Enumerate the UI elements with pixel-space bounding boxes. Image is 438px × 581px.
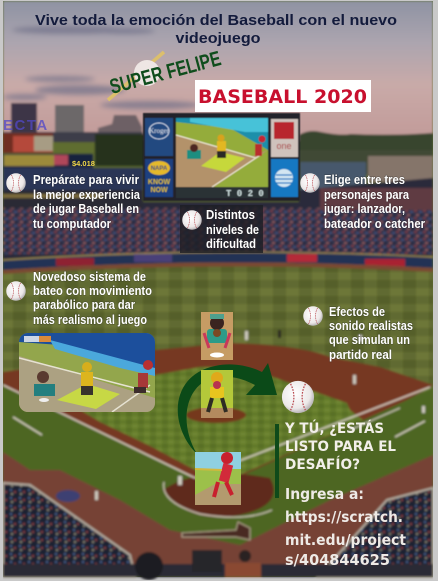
foul lines	[3, 385, 430, 478]
feature: efectos de sonido: Efectos de	[329, 305, 385, 319]
fielders	[95, 331, 425, 500]
score strip: T 0 2 0	[226, 189, 264, 199]
feature: mejor experiencia	[6, 173, 141, 231]
at&t ad	[271, 159, 298, 197]
feature: sistema de bateo: Novedoso sistema de	[33, 270, 146, 284]
icon: large baseball	[282, 381, 314, 413]
city skyline	[3, 103, 433, 163]
feature: efectos de sonido: partido real	[329, 348, 392, 362]
pitcher on screen	[255, 136, 266, 156]
napa ad: NOW	[150, 187, 168, 194]
left stands	[3, 483, 135, 577]
project link: mit.edu/project	[285, 531, 406, 549]
scoreboard	[143, 113, 300, 201]
call to action	[284, 419, 396, 473]
napa ad: NAPA	[151, 166, 168, 172]
catcher in screenshot	[34, 371, 55, 402]
kroger ad	[145, 118, 173, 156]
batter on screen	[217, 134, 226, 158]
feature: tres personajes: jugar: lanzador,	[323, 202, 405, 216]
catcher on screen	[187, 144, 201, 159]
napa ad	[145, 159, 173, 197]
project link	[285, 485, 406, 569]
banner: baseball 2020	[195, 80, 371, 112]
title	[35, 12, 397, 47]
clouds	[3, 26, 200, 109]
chick-fil-a ad	[271, 119, 298, 157]
logo: super felipe with bat and ball: SUPER FELIPE	[107, 47, 223, 99]
feature: tres personajes	[300, 173, 425, 231]
kroger ad: Kroger	[149, 127, 170, 135]
feature: efectos de sonido: sonido realistas	[329, 319, 413, 333]
character card: batter	[201, 370, 233, 418]
icon: baseball	[6, 281, 26, 301]
home plate dirt circle	[163, 474, 274, 517]
arrow: curved green	[178, 363, 277, 454]
feature: sistema de bateo: parabólico para dar	[33, 298, 135, 312]
title: Vive toda la emoción del Baseball con el nuevo	[35, 12, 397, 29]
icon: baseball	[300, 173, 320, 193]
outfield trees and buildings	[95, 134, 433, 192]
outfield wall with sponsor boards	[3, 252, 433, 270]
faded sign lettering: ECTA	[3, 117, 49, 134]
call to action: LISTO PARA EL	[285, 439, 396, 455]
spectators	[135, 550, 261, 580]
icon: baseball	[182, 210, 202, 230]
call to action: Y TÚ, ¿ESTÁS	[284, 419, 384, 437]
feature: niveles de dificultad: Distintos	[206, 208, 255, 222]
character card: pitcher	[195, 452, 241, 505]
scoreboard screen	[176, 118, 268, 199]
feature: niveles de dificultad: niveles de	[206, 223, 259, 237]
feature: tres personajes: personajes para	[324, 188, 410, 202]
feature: mejor experiencia: la mejor experiencia	[33, 188, 141, 202]
icon: baseball	[303, 306, 323, 326]
character card: catcher	[201, 312, 233, 360]
sky	[3, 1, 433, 141]
project link: https://scratch.	[285, 508, 403, 526]
foul territory dirt	[3, 452, 433, 577]
title: videojuego	[176, 30, 260, 47]
call to action: DESAFÍO?	[285, 456, 360, 473]
project link: s/404844625	[285, 551, 390, 569]
project link: Ingresa a:	[285, 485, 364, 503]
icon: baseball	[6, 173, 26, 193]
feature: sistema de bateo	[6, 270, 152, 327]
game screenshot	[19, 333, 155, 412]
feature: efectos de sonido: que simulan un	[329, 333, 410, 347]
banner: baseball 2020: BASEBALL 2020	[198, 86, 367, 108]
left signs	[3, 133, 143, 194]
chick-fil-a ad: one	[276, 141, 292, 151]
feature: niveles de dificultad	[180, 205, 263, 253]
pitcher in screenshot	[134, 360, 153, 393]
feature: mejor experiencia: de jugar Baseball en	[33, 202, 139, 216]
right stands	[318, 488, 433, 577]
lower grass	[3, 386, 433, 545]
feature: mejor experiencia: Prepárate para vivir	[33, 173, 139, 187]
feature: mejor experiencia: tu computador	[33, 217, 111, 231]
divider bar	[275, 424, 279, 498]
team logo on field	[182, 522, 250, 540]
field: outfield grass	[3, 262, 433, 577]
infield grass	[60, 367, 363, 486]
stadium stands: upper deck	[3, 178, 433, 262]
feature: sistema de bateo: más realismo al juego	[33, 313, 147, 327]
napa ad: KNOW	[148, 179, 170, 186]
feature: sistema de bateo: bateo con movimiento	[33, 284, 152, 298]
batter in screenshot	[81, 362, 93, 395]
price sign: $4.018	[72, 159, 95, 168]
feature: efectos de sonido	[303, 305, 413, 362]
feature: tres personajes: Elige entre tres	[324, 173, 405, 187]
feature: niveles de dificultad: dificultad	[206, 237, 256, 251]
feature: tres personajes: bateador o catcher	[324, 217, 425, 231]
on-field logo	[56, 490, 80, 502]
logo: super felipe with bat and ball	[107, 47, 223, 100]
infield dirt	[3, 343, 433, 488]
